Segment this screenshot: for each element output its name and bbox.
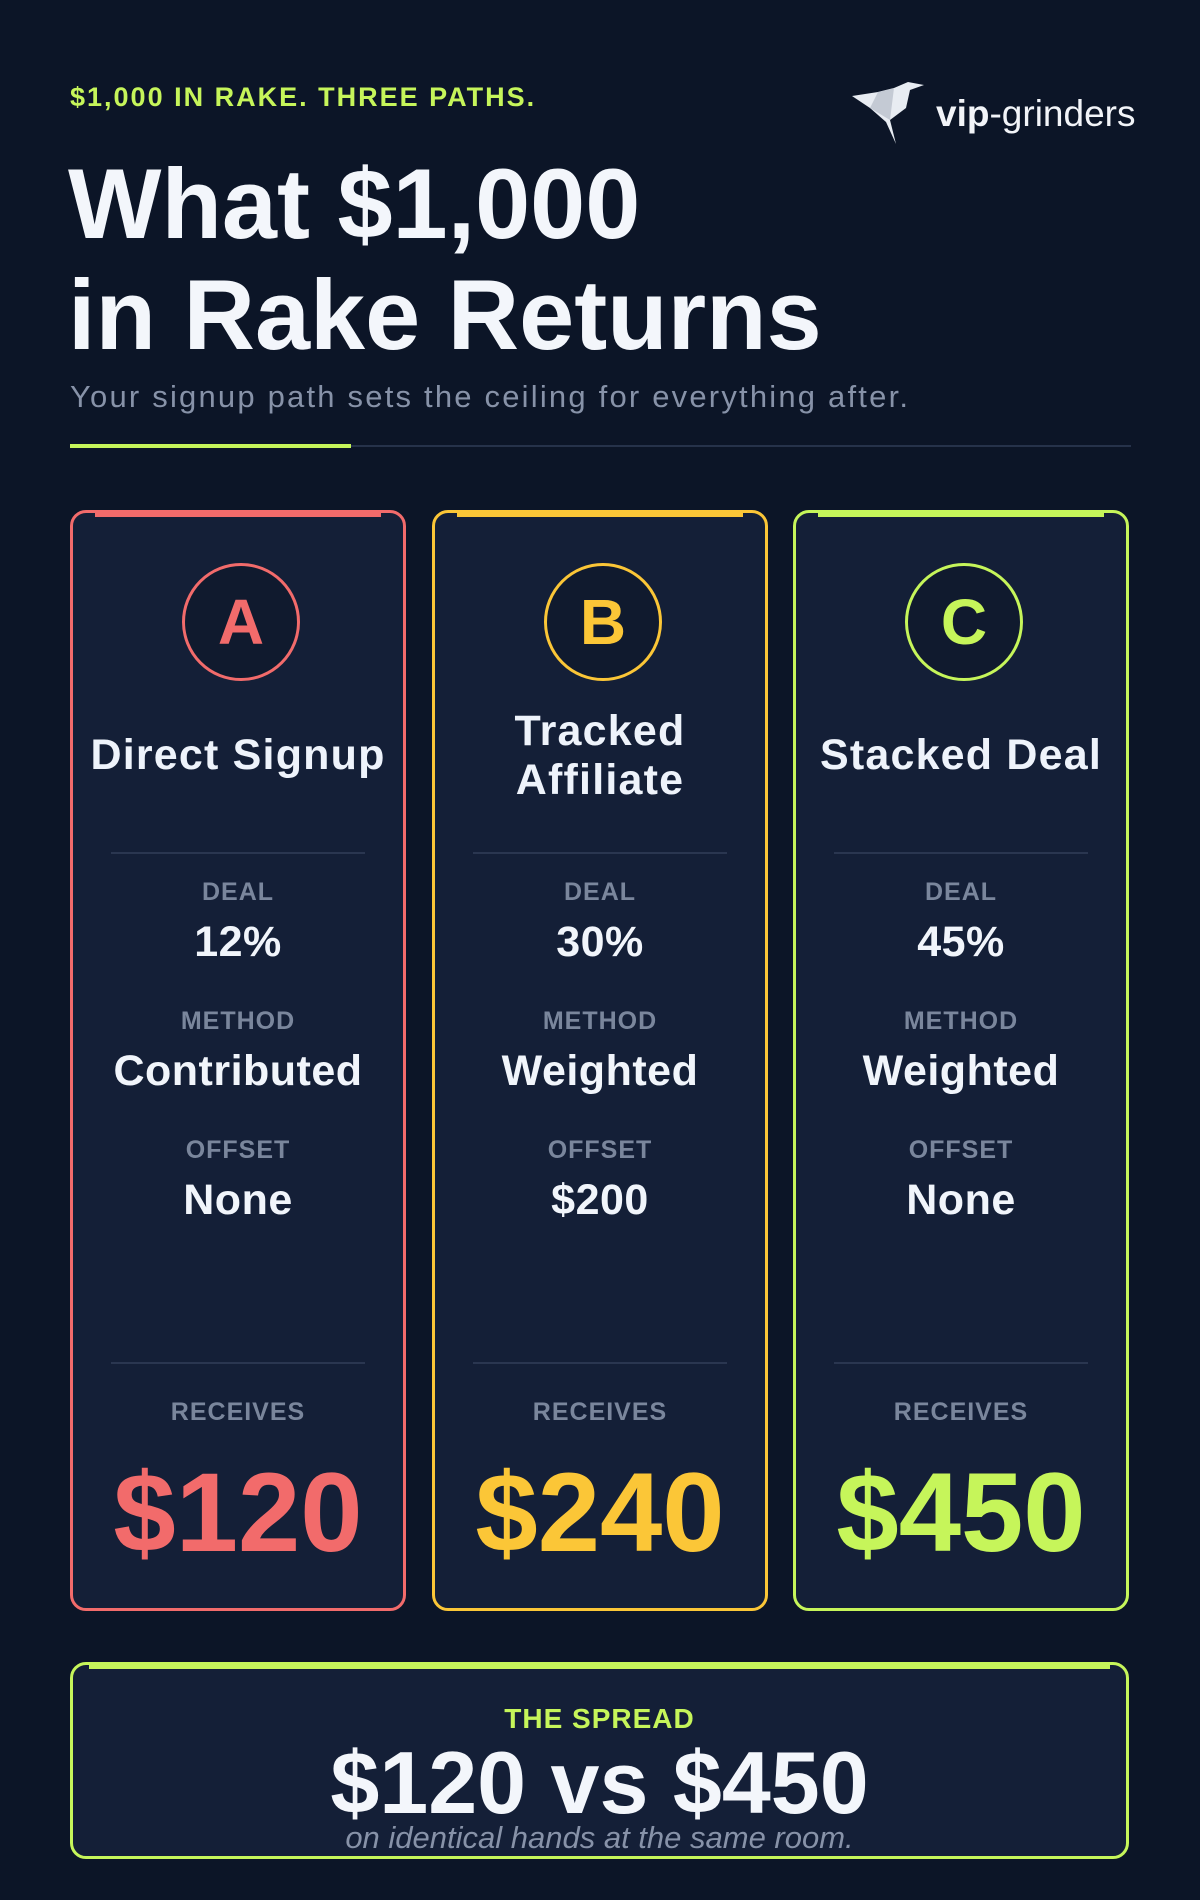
icon: circle A: A <box>218 586 264 658</box>
title <box>68 148 822 370</box>
receives: RECEIVES <box>171 1398 305 1426</box>
logo text: vip-grinders <box>936 93 1135 134</box>
card title: Stacked Deal <box>820 731 1102 779</box>
details: None <box>906 1176 1016 1224</box>
details <box>862 878 1059 1224</box>
details: DEAL <box>925 878 997 906</box>
details: OFFSET <box>909 1136 1013 1164</box>
receives: $450 <box>836 1450 1086 1575</box>
card title: Direct Signup <box>90 731 386 779</box>
card title: Affiliate <box>516 756 684 804</box>
details: DEAL <box>564 878 636 906</box>
icon: circle B <box>544 563 662 681</box>
icon: circle A <box>182 563 300 681</box>
receives: RECEIVES <box>533 1398 667 1426</box>
subtitle: Your signup path sets the ceiling for everything after. <box>70 379 910 414</box>
card title <box>514 707 685 804</box>
details: Contributed <box>113 1047 363 1095</box>
spread label: THE SPREAD <box>504 1703 695 1734</box>
icon: bird <box>852 82 924 144</box>
details: OFFSET <box>548 1136 652 1164</box>
details: 30% <box>556 918 644 966</box>
icon: circle C: C <box>941 586 987 658</box>
panel: B tracked affiliate <box>432 510 768 1611</box>
details: 12% <box>194 918 282 966</box>
title: in Rake Returns <box>68 259 822 370</box>
details <box>113 878 363 1224</box>
receives: $240 <box>475 1450 725 1575</box>
receives: $120 <box>113 1450 363 1575</box>
details: OFFSET <box>186 1136 290 1164</box>
details: METHOD <box>904 1007 1018 1035</box>
details: METHOD <box>181 1007 295 1035</box>
panel: A direct signup <box>70 510 406 1611</box>
panel: the spread <box>70 1662 1129 1859</box>
caption: on identical hands at the same room. <box>345 1820 854 1855</box>
details: $200 <box>551 1176 649 1224</box>
spread value: $120 vs $450 <box>330 1733 869 1832</box>
icon: circle B: B <box>580 586 626 658</box>
details: Weighted <box>502 1047 698 1095</box>
receives: RECEIVES <box>894 1398 1028 1426</box>
card title: Tracked <box>515 707 685 755</box>
details: DEAL <box>202 878 274 906</box>
panel: C stacked deal <box>793 510 1129 1611</box>
details: Weighted <box>863 1047 1059 1095</box>
details <box>502 878 698 1224</box>
details: METHOD <box>543 1007 657 1035</box>
icon: circle C <box>905 563 1023 681</box>
eyebrow: $1,000 IN RAKE. THREE PATHS. <box>70 82 536 112</box>
title: What $1,000 <box>68 148 640 259</box>
details: None <box>183 1176 293 1224</box>
logo: vip-grinders <box>852 82 1135 144</box>
details: 45% <box>917 918 1005 966</box>
